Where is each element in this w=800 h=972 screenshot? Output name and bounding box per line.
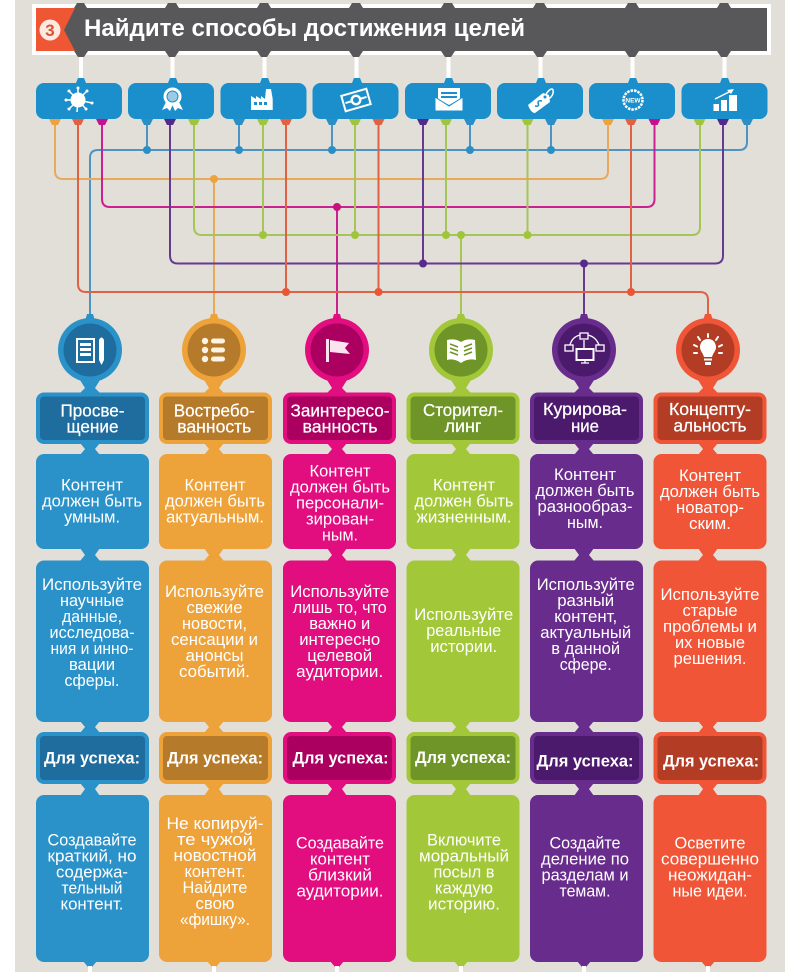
heading: Курирова- (543, 399, 627, 419)
label: success: Для успеха: (292, 748, 388, 767)
line: blue (90, 125, 747, 318)
text: success tip: содержа- (56, 863, 128, 882)
text: advice: событий. (179, 662, 250, 681)
heading: альность (674, 416, 746, 436)
text: success tip: Создайте (550, 833, 620, 852)
text: advice: вации (69, 655, 115, 674)
text: advice: данные, (62, 607, 122, 626)
icon box: new (589, 78, 675, 125)
text: success tip (166, 814, 264, 929)
line: orange (55, 125, 608, 318)
text: advice: в данной (551, 639, 620, 658)
icon: network (565, 333, 604, 363)
text: requirement: Контент (554, 465, 616, 484)
text: success tip: разделам и (542, 865, 628, 884)
text: success tip: свою (196, 894, 235, 913)
text: advice: исследова- (50, 623, 134, 642)
text: requirement: новатор- (676, 498, 744, 517)
text: requirement (660, 466, 760, 533)
text: requirement: Контент (184, 476, 246, 495)
text: advice: их новые (675, 633, 745, 652)
text: advice (290, 582, 389, 681)
column: Курирование (530, 314, 643, 967)
text: advice: сферы. (64, 671, 120, 690)
text: success tip: каждую (435, 879, 493, 898)
text: requirement: зирован- (306, 510, 374, 529)
text: success tip (48, 831, 136, 914)
text: requirement (290, 462, 390, 545)
text: advice: реальные (426, 621, 501, 640)
text: success tip (541, 833, 629, 900)
text: advice: интересно (299, 630, 380, 649)
text: requirement (42, 476, 142, 527)
heading: линг (444, 416, 482, 436)
text: requirement: Контент (679, 466, 741, 485)
shapes (698, 314, 718, 967)
text: advice (537, 575, 635, 674)
heading: ванность (302, 417, 378, 437)
text: success tip (661, 833, 759, 900)
text: success tip: моральный (419, 847, 509, 866)
text: advice: аудитории. (296, 662, 383, 681)
text: advice: сфере. (560, 655, 612, 674)
top icon boxes (36, 78, 768, 125)
icon box: money (312, 78, 398, 125)
text: success tip: деление по (541, 849, 629, 868)
column: Просвещение (36, 314, 149, 967)
icon box: science (36, 78, 122, 125)
text: success tip: Найдите (182, 878, 248, 897)
text: advice (165, 582, 264, 681)
text: success tip: историю. (428, 895, 500, 914)
shapes (204, 314, 224, 967)
heading: Востребо- (174, 401, 255, 421)
heading: ние (571, 416, 599, 436)
text: requirement: разнообраз- (538, 497, 632, 516)
text: success tip: контент. (184, 862, 246, 881)
text: requirement: должен быть (536, 481, 635, 500)
text: success tip: ные идеи. (672, 881, 748, 900)
text: advice: научные (60, 591, 124, 610)
heading (543, 399, 627, 436)
title: Найдите способы достижения целей (84, 15, 525, 42)
shapes (327, 314, 347, 967)
text: advice: разный (557, 591, 614, 610)
text: advice: Используйте (660, 585, 760, 604)
heading: Просве- (60, 401, 125, 421)
text: advice: Используйте (42, 575, 142, 594)
text: advice: новости, (182, 614, 247, 633)
text: success tip: тельный (62, 879, 122, 898)
icon box: price tag (497, 78, 583, 125)
text: success tip: аудитории. (296, 881, 384, 900)
heading: ванность (177, 417, 251, 437)
heading: Концепту- (669, 399, 751, 419)
text: advice: целевой (307, 646, 372, 665)
icon: open book (447, 339, 476, 363)
white connectors below columns (90, 966, 708, 972)
text: requirement: ным. (322, 526, 358, 545)
text: requirement (536, 465, 635, 532)
heading: щение (66, 417, 118, 437)
shapes (574, 314, 594, 967)
heading (290, 401, 390, 437)
text: requirement: персонали- (296, 494, 384, 513)
icon box: award (128, 78, 214, 125)
text: success tip: совершенно (661, 849, 759, 868)
text: success tip: близкий (308, 865, 372, 884)
line: magenta (102, 125, 654, 318)
text: success tip: Не копируй- (166, 814, 264, 833)
text: advice: Используйте (414, 605, 513, 624)
text: requirement: умным. (64, 508, 120, 527)
text: requirement: должен быть (660, 482, 760, 501)
connector network (55, 125, 747, 318)
text: requirement: Контент (310, 462, 371, 481)
text: advice: лишь то, что (293, 598, 387, 617)
header banner (32, 3, 771, 57)
text: success tip: Создавайте (296, 833, 384, 852)
number badge: 3 (45, 21, 55, 40)
shapes (80, 314, 100, 967)
text: success tip (419, 831, 509, 914)
heading: Сторител- (423, 400, 503, 420)
text: success tip: контент. (60, 895, 124, 914)
line: purple (170, 125, 723, 318)
text: advice: контент, (554, 607, 617, 626)
text: success tip: Создавайте (48, 831, 136, 850)
text: requirement: актуальным. (166, 508, 264, 527)
text: requirement: должен быть (414, 492, 514, 511)
text: advice (414, 605, 513, 656)
text: advice (660, 585, 760, 668)
text: success tip: темам. (560, 881, 610, 900)
line: red (78, 125, 708, 318)
column: Сторителлинг (406, 314, 520, 967)
text: advice: старые (682, 601, 738, 620)
text: advice: анонсы (186, 646, 244, 665)
text: advice: свежие (186, 598, 242, 617)
heading (423, 400, 503, 436)
icon box: growth chart (682, 78, 768, 125)
text: success tip: новостной (174, 846, 256, 865)
text: advice: актуальный (540, 623, 631, 642)
heading (174, 401, 255, 437)
label: success: Для успеха: (663, 752, 759, 771)
text: requirement: ным. (567, 513, 603, 532)
number badge (40, 20, 60, 40)
text: requirement: должен быть (165, 492, 265, 511)
icon: light bulb (694, 334, 722, 365)
icon: flag (326, 339, 350, 362)
text: advice: сенсации и (171, 630, 258, 649)
text: success tip: посыл в (434, 863, 494, 882)
column: Заинтересованность (283, 314, 396, 967)
text: success tip: Осветите (674, 833, 746, 852)
text: advice (42, 575, 142, 690)
text: success tip: краткий, но (48, 847, 136, 866)
text: success tip: Включите (427, 831, 501, 850)
text: requirement (165, 476, 265, 527)
text: advice: Используйте (165, 582, 264, 601)
column: Востребованность (159, 314, 272, 967)
heading (669, 399, 751, 436)
icon box: mail (405, 78, 491, 125)
text: advice: важно и (309, 614, 370, 633)
column: Концептуальность (654, 314, 766, 967)
heading (60, 401, 125, 437)
text: requirement: Контент (61, 476, 123, 495)
text: success tip: те чужой (177, 830, 253, 849)
label: success: Для успеха: (415, 748, 511, 767)
icon box: factory (220, 78, 306, 125)
text: success tip: «фишку». (180, 910, 250, 929)
text: requirement: ским. (689, 514, 731, 533)
text: advice: Используйте (537, 575, 635, 594)
text: success tip: неожидан- (668, 865, 752, 884)
heading: Заинтересо- (290, 401, 390, 421)
label: success: Для успеха: (167, 748, 263, 767)
label: success: Для успеха: (44, 748, 140, 767)
text: advice: ния и инно- (50, 639, 134, 658)
text: advice: истории. (430, 637, 497, 656)
text: advice: решения. (674, 649, 746, 668)
icon box: new: NEW (625, 98, 641, 104)
text: success tip: контент (310, 849, 370, 868)
text: requirement: должен быть (42, 492, 142, 511)
icon: document and pencil (77, 338, 104, 365)
shapes (451, 314, 471, 967)
text: advice: Используйте (290, 582, 389, 601)
icon: list (202, 338, 225, 362)
white connectors from banner to icon boxes (81, 57, 724, 80)
text: requirement: должен быть (290, 478, 390, 497)
text: success tip (296, 833, 384, 900)
text: requirement: Контент (433, 476, 495, 495)
line: green (194, 125, 700, 318)
label: success: Для успеха: (536, 752, 634, 771)
text: requirement (414, 476, 514, 527)
text: advice: проблемы и (663, 617, 757, 636)
text: requirement: жизненным. (416, 508, 512, 527)
